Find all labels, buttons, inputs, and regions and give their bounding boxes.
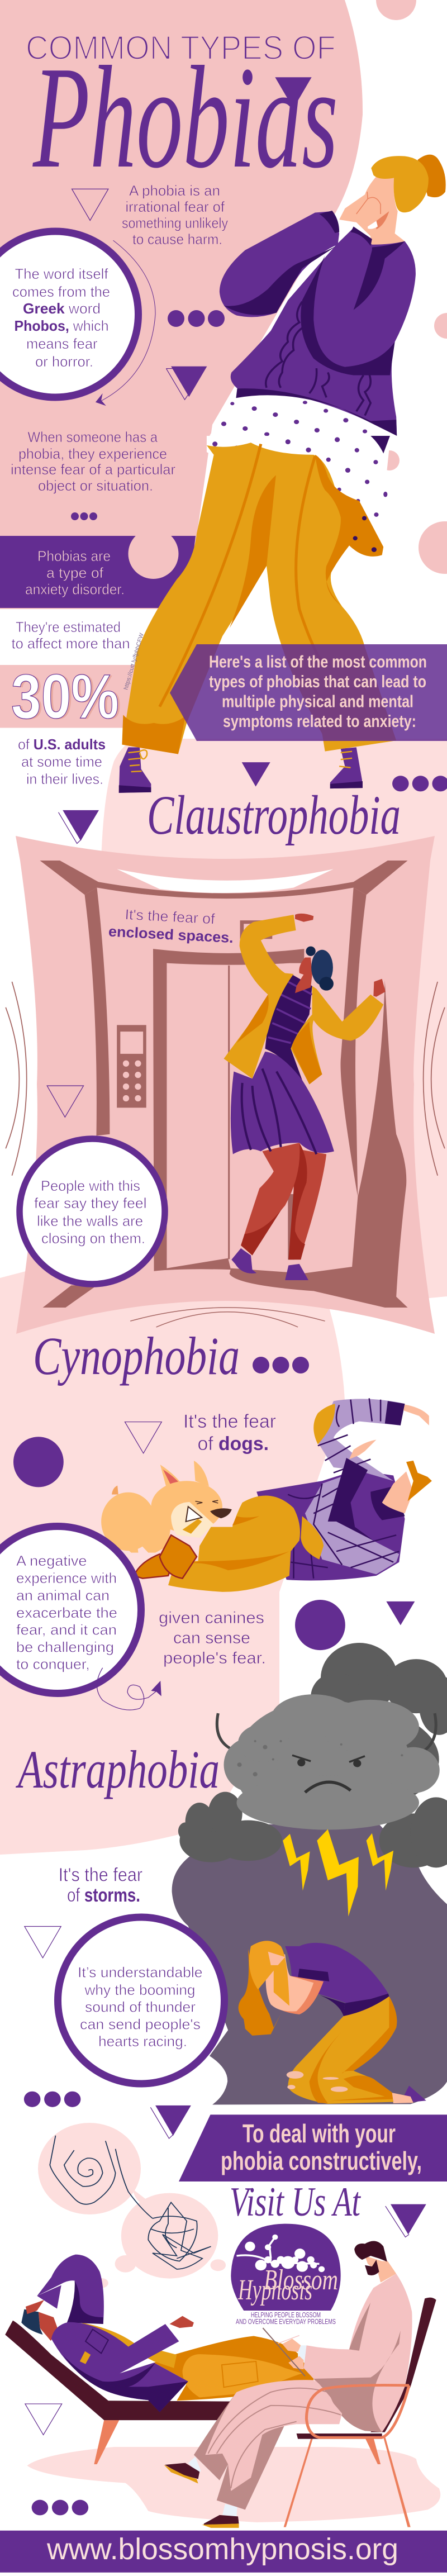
circle callout: walls closing: closing on them. (41, 1230, 145, 1247)
corner struts (40, 861, 408, 899)
circle callout: greek word: comes from the (12, 283, 110, 300)
circle callout: walls closing: People with this (41, 1177, 140, 1194)
elevator illustration (6, 836, 445, 1334)
background: decorative pink circles (376, 0, 447, 574)
circle callout: negative experience: to conquer, (16, 1656, 90, 1672)
text: when someone has a phobia: intense fear of a particular (11, 461, 175, 478)
circle callout: negative experience: A negative (16, 1552, 87, 1569)
text: of us adults: at some time (21, 753, 102, 770)
text: of us adults: of U.S. adults (18, 736, 106, 753)
figure: woman biting nails (119, 155, 446, 793)
band: 30 percent background (0, 665, 137, 728)
logo: blossom hypnosis: Blossom (264, 2264, 338, 2296)
door frame (153, 949, 304, 1271)
text: fear of dogs: of dogs. (198, 1433, 269, 1455)
circle callout: walls closing (20, 1139, 165, 1284)
therapist hands and tablet (298, 2345, 306, 2363)
stat: 30 percent: 30% (11, 662, 119, 731)
background: pink blob (0, 0, 363, 609)
circle callout: thunder: can send people's (80, 2016, 201, 2033)
banner: list intro (170, 644, 447, 741)
spiral and scribble (50, 2136, 211, 2269)
text: fear of enclosed spaces (108, 905, 235, 946)
therapist head (365, 2256, 396, 2283)
text: fear of storms: of storms. (67, 1885, 140, 1906)
logo: blossom hypnosis (231, 2224, 341, 2326)
shapes above claustrophobia (59, 762, 447, 843)
text: they're estimated: They're estimated (16, 619, 121, 635)
left boot (119, 747, 151, 793)
small dots (71, 512, 97, 520)
circle callout: thunder: why the booming (84, 1981, 196, 1998)
text: fear of enclosed spaces: It's the fear of (125, 906, 216, 927)
circle callout: greek word (0, 231, 139, 397)
text: phobias are a type of anxiety disorder: Phobias are (37, 548, 111, 564)
circle callout: walls closing: like the walls are (37, 1213, 143, 1229)
lightning bolts (283, 1829, 393, 1917)
logo: blossom hypnosis: HELPING PEOPLE BLOSSOM (251, 2311, 321, 2319)
pants (122, 443, 396, 754)
text: when someone has a phobia: phobia, they experience (18, 445, 167, 462)
dog (101, 1461, 232, 1553)
text: canines sense fear: people's fear. (163, 1649, 266, 1667)
text: fear of dogs (183, 1411, 276, 1455)
circle callout: greek word: Phobos, which (15, 317, 108, 334)
dots (253, 1357, 309, 1373)
band: anxiety disorder (0, 529, 196, 608)
banner: to deal with your phobia (179, 2114, 447, 2181)
text: of us adults: in their lives. (26, 771, 103, 787)
text: a phobia is an irrational fear: A phobia is an (129, 182, 220, 199)
kneeling woman (239, 1941, 426, 2104)
text: they're estimated: to affect more than (11, 635, 130, 652)
text: when someone has a phobia: When someone has a (28, 429, 158, 445)
dark cloud (178, 1643, 447, 1867)
logo: blossom hypnosis: Hypnosis (237, 2274, 312, 2306)
arrow: looping (97, 1668, 161, 1710)
text: canines sense fear: can sense (173, 1629, 250, 1647)
text: fear of storms: It's the fear (59, 1865, 142, 1886)
text: fear of enclosed spaces: enclosed spaces. (108, 923, 234, 946)
therapist chair (284, 2385, 411, 2527)
circle callout: thunder: sound of thunder (85, 1999, 196, 2016)
circle callout: thunder: It’s understandable (78, 1964, 202, 1981)
text: phobias are a type of anxiety disorder: anxiety disorder. (25, 581, 125, 598)
shapes (13, 1422, 415, 1650)
branch (236, 2235, 325, 2272)
footer band: www.blossomhypnosis.org (46, 2532, 398, 2566)
elevator floor arcs (130, 1308, 325, 1327)
shadow on wall (230, 980, 408, 1308)
man pants (168, 1496, 300, 1592)
circle callout: negative experience: exacerbate the (16, 1604, 117, 1621)
right boot (330, 747, 363, 788)
text: phobias are a type of anxiety disorder: a type of (46, 564, 104, 581)
couch (5, 2321, 236, 2464)
text: they're estimated (11, 619, 130, 652)
stat: 30 percent: 30% (13, 662, 121, 732)
title: astraphobia: Astraphobia (15, 1739, 220, 1799)
title: cynophobia: Cynophobia (33, 1326, 240, 1386)
floor blob (27, 2447, 440, 2522)
footer band (0, 2531, 447, 2573)
circle callout: greek word: Greek word (23, 300, 101, 317)
visit us at: Visit Us At (230, 2179, 362, 2225)
thought bubbles (38, 2123, 226, 2288)
circle callout: negative experience: fear, and it can (16, 1622, 117, 1638)
man attacked by dog (101, 1398, 432, 1592)
text: a phobia is an irrational fear: to cause harm. (132, 231, 222, 248)
storm illustration (172, 1643, 447, 2104)
side ripple arcs (6, 982, 445, 1176)
text: canines sense fear (159, 1609, 266, 1667)
shapes by callout (24, 1927, 191, 2138)
circle callout: greek word: means fear (26, 335, 98, 352)
storm backdrop (172, 1824, 447, 2104)
text: fear of dogs: It's the fear (183, 1411, 276, 1432)
shoes and socks (164, 2457, 239, 2528)
patient raised arm (37, 2255, 104, 2324)
text: a phobia is an irrational fear: something unlikely (122, 215, 228, 231)
arrow: curved around circle (96, 240, 155, 406)
patient legs (154, 2336, 313, 2401)
text: fear of storms (59, 1865, 142, 1906)
elevator shell (16, 836, 435, 1334)
circle callout: negative experience: an animal can (16, 1587, 110, 1604)
triangles top (72, 77, 312, 220)
call panel (117, 1025, 146, 1108)
man shirt (256, 1470, 405, 1581)
therapist chair back (370, 2298, 436, 2432)
triangle pair (166, 367, 207, 400)
therapist torso (303, 2274, 412, 2432)
patient jacket (51, 2322, 188, 2412)
circle callout: negative experience: be challenging (16, 1638, 114, 1655)
triangles and dots lower (25, 2204, 426, 2515)
dots (168, 310, 225, 327)
circle callout: thunder: hearts racing. (98, 2033, 187, 2050)
text: of us adults (18, 736, 106, 787)
circle callout: greek word: The word itself (15, 265, 108, 282)
source url: https://cutt.ly/fphhCFW (122, 633, 145, 691)
patient head (39, 2312, 59, 2341)
patient shirt (77, 2322, 177, 2368)
text: when someone has a phobia (11, 429, 175, 494)
man boots (134, 1554, 171, 1579)
angry grey cloud (224, 1694, 440, 1829)
text: a phobia is an irrational fear (122, 182, 228, 248)
logo: blossom hypnosis: AND OVERCOME EVERYDAY PROBLEMS (236, 2318, 336, 2326)
title: phobias: Phobias (32, 36, 338, 198)
circle callout: thunder (58, 1917, 225, 2084)
background: light pink blob (0, 739, 447, 1855)
woman in elevator (224, 914, 386, 1280)
circle callout: walls closing: fear say they feel (34, 1195, 146, 1211)
banner: to deal with your phobia: To deal with your (242, 2119, 396, 2148)
text: a phobia is an irrational fear: irrational fear of (125, 198, 225, 215)
text: when someone has a phobia: object or situation. (38, 477, 153, 494)
couch and patient (5, 2241, 436, 2528)
text: phobias are a type of anxiety disorder (25, 548, 125, 598)
circle callout: negative experience (0, 1527, 141, 1693)
circle callout: negative experience: experience with (16, 1570, 117, 1586)
title: common types of: COMMON TYPES OF (26, 29, 336, 66)
circle callout: greek word: or horror. (35, 353, 93, 370)
text: canines sense fear: given canines (159, 1609, 264, 1627)
cloud arms (217, 1713, 436, 1754)
therapist legs (194, 2392, 285, 2510)
